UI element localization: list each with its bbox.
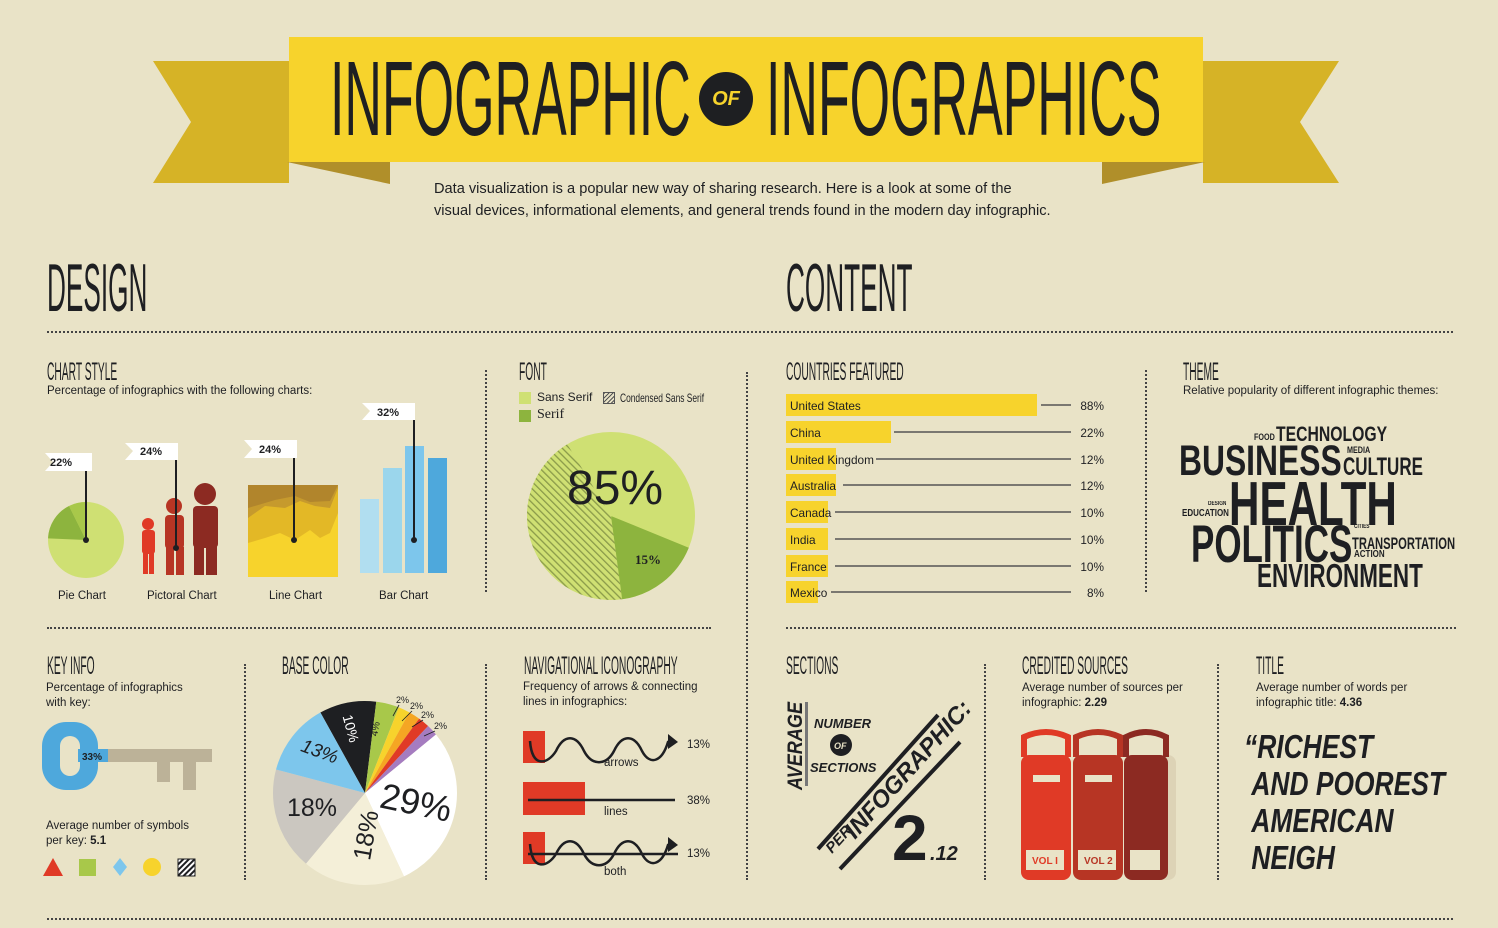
banner	[153, 37, 1339, 184]
pie chart	[527, 432, 695, 600]
sections typographic graphic: 2	[892, 802, 928, 874]
icon: key	[42, 722, 212, 790]
icon: books: VOL 2	[1084, 856, 1113, 867]
panel: navigational iconography: lines in infographics:	[523, 696, 627, 708]
bar chart: Mexico	[790, 586, 828, 600]
heading: design: DESIGN	[47, 250, 147, 326]
pie chart: 18%	[287, 794, 337, 822]
panel: title: infographic title: 4.36	[1256, 697, 1362, 709]
panel: key info: KEY INFO	[47, 652, 95, 680]
panel: credited sources	[1021, 652, 1183, 880]
panel: base color: BASE COLOR	[282, 652, 349, 680]
arrows chart: 13%	[687, 848, 710, 860]
icon: key: 33%	[82, 752, 102, 763]
pie chart: 2%	[434, 721, 447, 731]
word cloud: DESIGN	[1208, 501, 1226, 507]
panel: countries featured: COUNTRIES FEATURED	[786, 358, 904, 386]
word cloud: HEALTH	[1229, 470, 1397, 539]
icon: books	[1021, 729, 1176, 880]
word cloud: BUSINESS	[1179, 437, 1342, 485]
pie chart: 10%	[340, 713, 362, 744]
icon: books: VOL I	[1032, 856, 1058, 867]
title	[330, 40, 1161, 158]
panel: chart style: Bar Chart	[379, 590, 428, 602]
bar chart: Canada	[790, 506, 832, 520]
sections typographic graphic: SECTIONS	[810, 760, 877, 775]
people	[142, 518, 155, 574]
bar chart: 10%	[1080, 560, 1104, 574]
bar chart: Australia	[790, 479, 836, 493]
arrows chart: arrows	[604, 757, 639, 769]
panel: chart style: Line Chart	[269, 590, 322, 602]
panel: navigational iconography: Frequency of arrows & connecting	[523, 681, 698, 693]
panel: key info	[42, 652, 212, 876]
panel: countries featured	[786, 358, 1104, 603]
bar chart: United Kingdom	[790, 453, 874, 467]
panel: sections: SECTIONS	[786, 652, 838, 680]
bar chart: China	[790, 426, 821, 440]
chart icons: 24%	[259, 444, 281, 456]
word cloud: TRANSPORTATION	[1352, 534, 1455, 553]
panel: key info: per key: 5.1	[46, 835, 106, 847]
example title: “RICHEST	[1244, 728, 1373, 765]
chart icons	[45, 403, 447, 578]
bar chart: 22%	[1080, 426, 1104, 440]
icon: of badge: OF	[712, 88, 740, 110]
bar chart	[786, 394, 1104, 603]
panel: key info: with key:	[46, 697, 91, 709]
word cloud	[1179, 423, 1455, 594]
word cloud: FOOD	[1254, 432, 1275, 442]
icons: symbols	[43, 858, 196, 876]
example title	[1244, 728, 1447, 876]
panel: key info: Average number of symbols	[46, 820, 189, 832]
arrows chart: both	[604, 866, 626, 878]
sections typographic graphic	[784, 695, 977, 874]
example title: AND POOREST	[1251, 765, 1445, 802]
sections typographic graphic: NUMBER	[814, 716, 872, 731]
bar chart: 10%	[1080, 533, 1104, 547]
pie chart: 2%	[396, 695, 409, 705]
arrows chart: 13%	[687, 739, 710, 751]
panel: chart style	[45, 358, 447, 602]
bar chart: 8%	[1087, 586, 1104, 600]
bar chart: 12%	[1080, 479, 1104, 493]
bar chart: India	[790, 533, 816, 547]
pie chart: 18%	[348, 808, 384, 862]
heading: CHART STYLE	[47, 358, 117, 386]
panel: font	[519, 358, 704, 600]
panel: title: TITLE	[1256, 652, 1284, 680]
panel: key info: Percentage of infographics	[46, 682, 183, 694]
panel: title	[1244, 652, 1447, 876]
intro text	[434, 181, 1051, 219]
pie chart: 15%	[635, 552, 661, 567]
bar chart: 12%	[1080, 453, 1104, 467]
panel: navigational iconography	[523, 652, 710, 878]
word cloud: ENVIRONMENT	[1257, 557, 1423, 594]
legend: Condensed Sans Serif	[620, 391, 704, 405]
legend	[519, 390, 704, 422]
legend: Serif	[537, 407, 564, 422]
bars	[360, 499, 379, 573]
chart icons: 24%	[140, 446, 162, 458]
panel: font: FONT	[519, 358, 547, 386]
panel: title: Average number of words per	[1256, 682, 1407, 694]
labels: Pie Chart	[58, 590, 106, 602]
icon: of badge	[699, 72, 753, 126]
legend: Sans Serif	[537, 390, 592, 404]
sections typographic graphic: PER	[822, 822, 856, 857]
arrows chart	[523, 731, 710, 878]
panel: theme	[1179, 358, 1455, 594]
sections typographic graphic: OF	[834, 741, 847, 751]
panel: navigational iconography: NAVIGATIONAL ICONOGRAPHY	[524, 652, 678, 680]
chart icons: 22%	[50, 457, 72, 469]
line chart	[248, 485, 338, 577]
bar chart: 88%	[1080, 399, 1104, 413]
arrows chart: lines	[604, 806, 628, 818]
title: INFOGRAPHIC	[330, 40, 691, 158]
heading: content: CONTENT	[786, 250, 913, 326]
flags	[45, 403, 415, 471]
intro text: visual devices, informational elements, and general trends found in the modern day infographic.	[434, 203, 1051, 219]
word cloud: TECHNOLOGY	[1276, 423, 1387, 446]
panel: chart style: Pictoral Chart	[147, 590, 217, 602]
arrows chart: 38%	[687, 795, 710, 807]
text: Percentage of infographics with the following charts:	[47, 385, 312, 397]
pie chart: 2%	[421, 710, 434, 720]
panel: credited sources: Average number of sources per	[1022, 682, 1183, 694]
title: INFOGRAPHICS	[766, 40, 1161, 158]
word cloud: MEDIA	[1347, 445, 1370, 455]
word cloud: CITIES	[1354, 524, 1369, 530]
pie chart: 29%	[377, 775, 456, 830]
panel: credited sources: infographic: 2.29	[1022, 697, 1107, 709]
panel: theme: THEME	[1183, 358, 1219, 386]
word cloud: CULTURE	[1343, 453, 1423, 481]
pie chart: 2%	[410, 701, 423, 711]
word cloud: EDUCATION	[1182, 508, 1229, 519]
pie chart: 4%	[369, 721, 383, 737]
intro text: Data visualization is a popular new way of sharing research. Here is a look at some of the	[434, 181, 1012, 197]
panel: sections	[784, 652, 977, 874]
panel: theme: Relative popularity of different infographic themes:	[1183, 385, 1438, 397]
pie chart	[273, 695, 457, 885]
example title: AMERICAN	[1251, 802, 1394, 839]
panel: base color	[273, 652, 457, 885]
sections typographic graphic: .12	[930, 843, 958, 865]
word cloud: POLITICS	[1191, 515, 1352, 574]
pie chart: 13%	[298, 736, 341, 768]
bar chart: United States	[790, 399, 861, 413]
example title: NEIGH	[1251, 839, 1335, 876]
bar chart: 10%	[1080, 506, 1104, 520]
word cloud: ACTION	[1354, 549, 1385, 560]
bar chart: France	[790, 560, 827, 574]
sections typographic graphic: INFOGRAPHIC:	[839, 695, 977, 844]
panel: credited sources: CREDITED SOURCES	[1022, 652, 1128, 680]
pie chart: 85%	[567, 462, 663, 515]
chart icons: 32%	[377, 407, 399, 419]
